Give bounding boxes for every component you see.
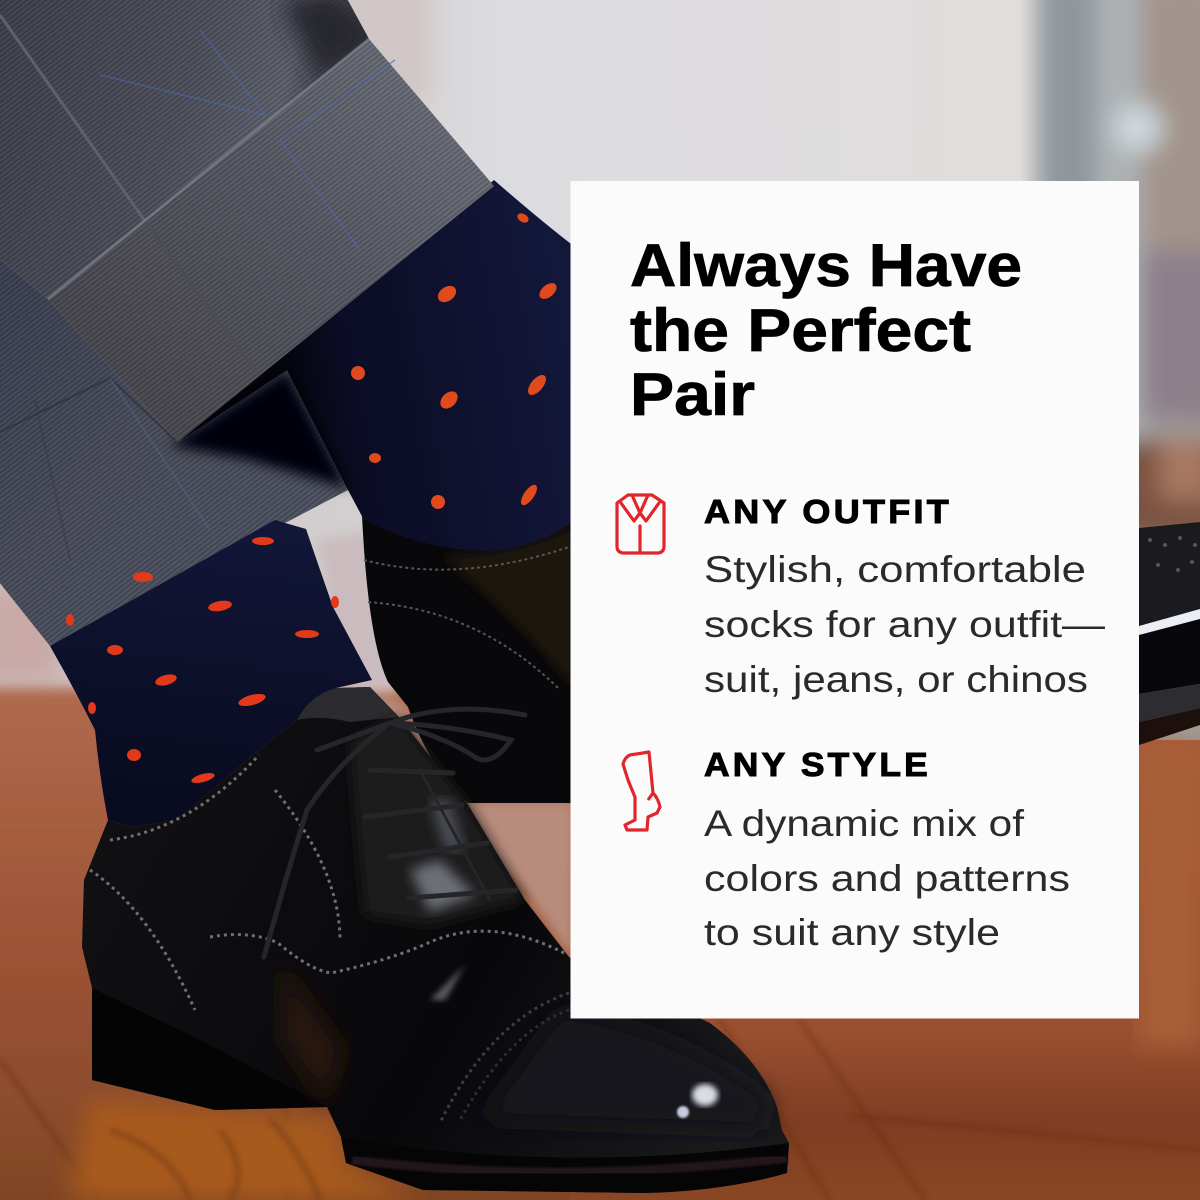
body text: any style: A dynamic mix of	[704, 803, 1025, 844]
background blurred objects	[0, 0, 1200, 680]
heading: Pair	[630, 361, 755, 428]
icon: sock leg	[623, 752, 660, 830]
heading: Always Have	[630, 232, 1022, 299]
body text: any outfit: Stylish, comfortable	[704, 549, 1086, 590]
heading	[630, 232, 1022, 428]
upper trouser leg and cuff	[0, 0, 494, 442]
label: any outfit: ANY OUTFIT	[704, 493, 952, 530]
item: any style	[623, 746, 1070, 953]
floor boards and grain	[0, 1020, 1200, 1200]
body text: any style	[704, 803, 1070, 953]
item: any outfit	[617, 493, 1105, 700]
body text: any outfit: socks for any outfit—	[704, 604, 1105, 645]
heading: the Perfect	[630, 297, 971, 364]
upper shoe	[362, 515, 1200, 803]
body text: any style: to suit any style	[704, 912, 1000, 953]
icon: shirt	[617, 495, 664, 553]
heel	[92, 988, 327, 1110]
upper sock	[178, 180, 575, 551]
sole	[341, 1137, 789, 1193]
panel	[570, 181, 1139, 1018]
body text: any outfit	[704, 549, 1105, 700]
wall and floor between the legs	[318, 530, 575, 965]
vamp shine	[410, 860, 475, 912]
lower sock	[50, 520, 372, 827]
body text: any outfit: suit, jeans, or chinos	[704, 659, 1088, 700]
laces	[264, 709, 525, 957]
label: any style: ANY STYLE	[704, 746, 931, 783]
wooden floor	[0, 688, 610, 1200]
background wall	[0, 0, 1200, 760]
body text: any style: colors and patterns	[704, 858, 1070, 899]
collar	[297, 687, 399, 722]
brogue stitching	[90, 755, 569, 1123]
lower shoe	[82, 687, 789, 1193]
lower trouser leg	[0, 255, 348, 646]
eyestay panel	[350, 717, 525, 925]
shoe shine	[692, 1084, 718, 1106]
